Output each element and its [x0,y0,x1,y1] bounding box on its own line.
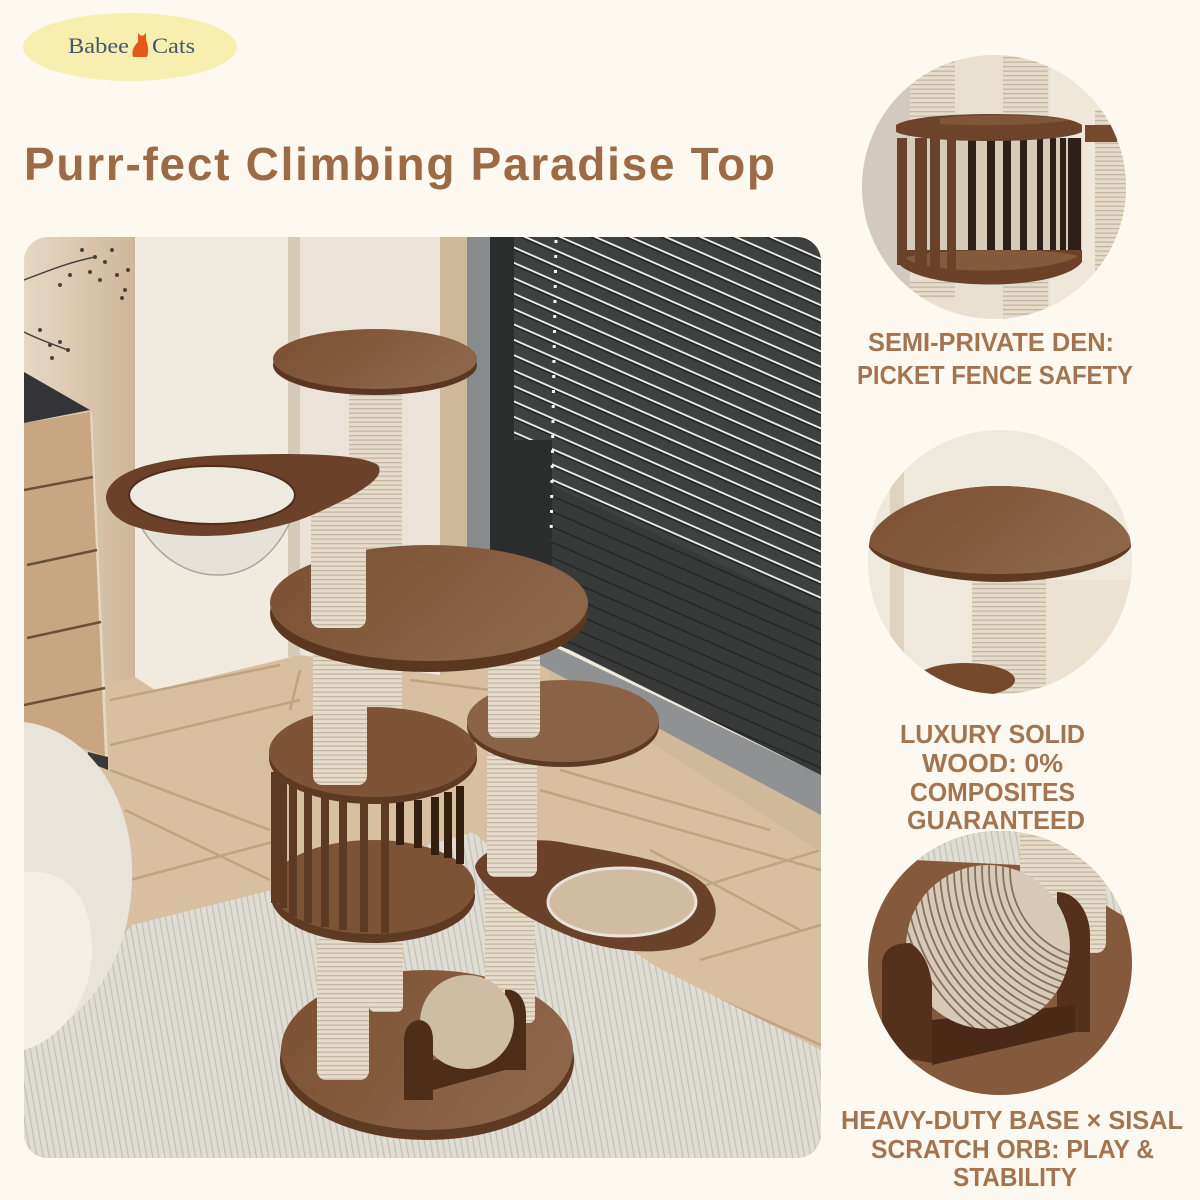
den floor [897,250,1082,284]
panel: main product photo [24,237,821,1158]
scratching post [1020,825,1106,953]
den rear pickets [400,786,460,864]
cat tree [106,329,716,1140]
den front pickets [897,138,956,278]
ring post [311,490,366,628]
caption: semi-private den: SEMI-PRIVATE DEN: [868,327,1114,357]
title: Purr-fect Climbing Paradise Top [24,138,775,190]
upper den post [313,650,367,785]
middle back post [367,667,402,709]
dresser [24,372,108,770]
branch decoration [24,248,130,360]
panel: base and ball detail circle [868,831,1132,1095]
lower ring platform [475,840,716,951]
armchair [24,722,132,1050]
den roof platform [269,707,477,804]
right platform [467,680,659,767]
wall panels [24,237,468,707]
caption: heavy-duty base: STABILITY [953,1162,1077,1192]
window blinds [467,237,821,797]
right middle post [487,750,537,877]
large middle platform [270,545,588,672]
upper ring platform [106,454,380,536]
window sill [540,640,821,852]
base platform [280,970,574,1140]
caption: luxury solid wood: WOOD: 0% [922,748,1063,778]
den front pickets [275,772,385,933]
top platform [273,329,477,395]
caption: heavy-duty base: SCRATCH ORB: PLAY & [871,1134,1154,1164]
rug [24,832,821,1158]
panel: den detail circle [860,54,1130,330]
rear top post [349,394,402,550]
caption: luxury solid wood: LUXURY SOLID [900,719,1085,749]
floor [24,640,821,1158]
logo badge [23,13,237,81]
caption: semi-private den: PICKET FENCE SAFETY [857,360,1133,390]
right upper post [488,650,540,738]
caption: heavy-duty base: HEAVY-DUTY BASE × SISAL [841,1105,1183,1135]
panel: wood detail circle [866,430,1136,700]
den lower platform [271,840,475,943]
caption: luxury solid wood: GUARANTEED [907,805,1085,835]
rug patch [917,831,1020,865]
right holder [1057,892,1090,1032]
acrylic bubble bowl [140,520,291,575]
den roof [896,114,1082,141]
lower back posts [369,885,535,1023]
caption: luxury solid wood [900,719,1085,835]
logo badge: Babee [68,33,129,58]
caption: heavy-duty base [841,1105,1183,1192]
logo badge: Cats [152,33,195,58]
scratch ball with stand [404,975,526,1100]
left holder [882,943,932,1063]
caption: semi-private den [857,327,1133,390]
den rear pickets [968,138,1081,250]
lower front post [317,935,369,1080]
scratch ball [906,865,1070,1029]
caption: luxury solid wood: COMPOSITES [910,777,1075,807]
